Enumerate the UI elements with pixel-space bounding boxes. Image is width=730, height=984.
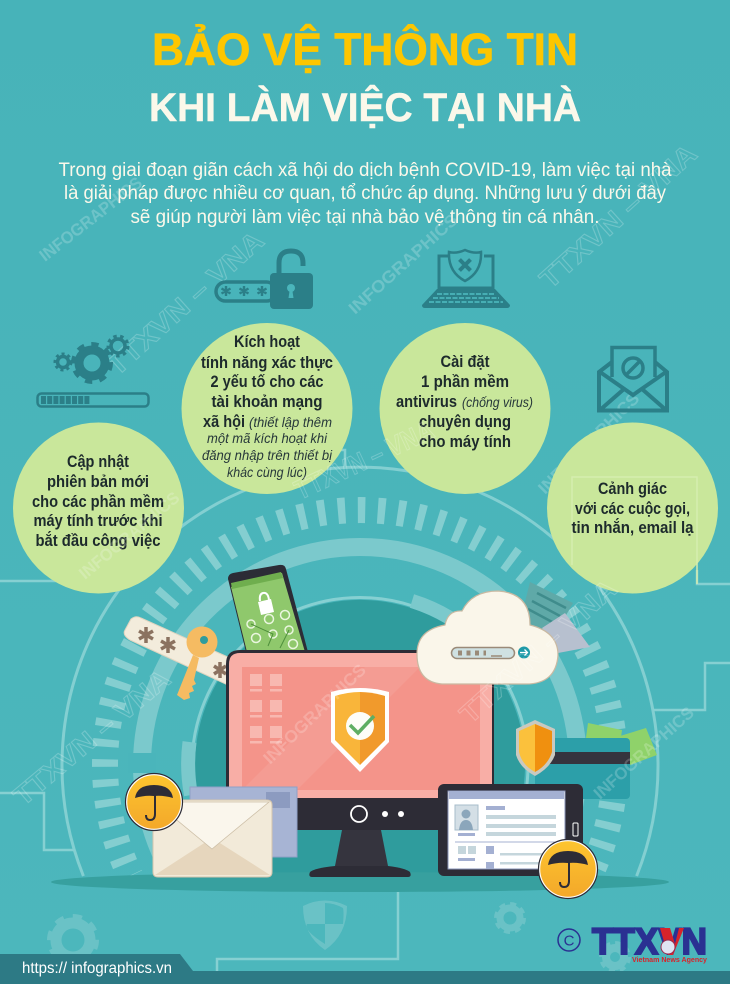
illustration: login cloud — [417, 591, 558, 684]
title — [149, 24, 581, 130]
illustration: smartphone — [228, 565, 308, 652]
background icons — [50, 900, 629, 971]
step 2 bubble: 2 yếu tố cho các — [210, 373, 324, 391]
step 2 bubble: tài khoản mạng — [212, 393, 322, 411]
watermarks over illustration: TTXVN – VNA — [290, 415, 438, 505]
intro paragraph: Trong giai đoạn giãn cách xã hội do dịch bệnh COVID-19, làm việc tại nhà — [58, 160, 672, 181]
icon: password lock — [216, 251, 313, 309]
step 4 bubble: với các cuộc gọi, — [575, 500, 690, 518]
step 4 bubble: tin nhắn, email lạ — [572, 518, 694, 537]
illustration: tablet with profile — [438, 784, 583, 876]
icon: laptop with shield — [422, 250, 510, 308]
footer bar — [0, 954, 730, 984]
step 2 bubble: (thiết lập thêm — [249, 414, 332, 430]
illustration: monitor — [226, 650, 494, 877]
illustration: newspaper behind cloud — [520, 582, 590, 653]
step 1 bubble: cho các phần mềm — [32, 493, 164, 511]
intro paragraph: là giải pháp được nhiều cơ quan, tổ chức áp dụng. Những lưu ý dưới đây — [64, 183, 666, 204]
intro paragraph: sẽ giúp người làm việc tại nhà bảo vệ thông tin cá nhân. — [130, 207, 600, 228]
watermarks over illustration: INFOGRAPHICS — [75, 488, 183, 583]
step 2 bubble: tính năng xác thực — [201, 354, 333, 372]
illustration: credit card, money and shield — [516, 720, 657, 799]
watermarks over illustration: INFOGRAPHICS — [260, 660, 370, 768]
illustration: envelope — [153, 800, 272, 877]
watermarks over illustration: TTXVN – VNA — [8, 663, 176, 812]
icon: gears and progress bar — [38, 336, 148, 406]
step 3 bubble: 1 phần mềm — [421, 373, 509, 391]
watermarks — [36, 138, 703, 498]
icon: umbrella badge left — [126, 774, 182, 830]
watermarks over illustration: INFOGRAPHICS — [590, 703, 698, 803]
monitor buttons — [351, 806, 367, 822]
watermarks: INFOGRAPHICS — [36, 173, 146, 265]
step 1 bubble: Cập nhật — [67, 453, 129, 471]
step 3 bubble: chuyên dụng — [419, 413, 511, 431]
step 4 bubble — [547, 422, 718, 594]
step 2 bubble: đăng nhập trên thiết bị — [202, 447, 333, 463]
security shield — [331, 688, 389, 772]
illustration: password strip and key — [124, 617, 230, 700]
title: BẢO VỆ THÔNG TIN — [152, 24, 578, 75]
title: KHI LÀM VIỆC TẠI NHÀ — [149, 84, 581, 130]
background shield — [303, 900, 347, 950]
step 4 bubble: Cảnh giác — [598, 480, 667, 498]
step 2 bubble: khác cùng lúc) — [227, 464, 307, 480]
icon: envelope with blocked symbol — [599, 348, 667, 410]
step 3 bubble: antivirus — [396, 393, 457, 411]
watermarks: TTXVN – VNA — [534, 138, 703, 294]
step 2 bubble: xã hội — [203, 413, 245, 431]
step 3 bubble — [380, 323, 550, 494]
step 1 bubble: bắt đầu công việc — [36, 531, 160, 550]
step 2 bubble: Kích hoạt — [234, 333, 300, 351]
watermarks: TTXVN – VNA — [101, 225, 270, 381]
app icons — [250, 674, 282, 744]
illustration: blue document — [190, 787, 297, 857]
step 2 bubble: một mã kích hoạt khi — [207, 430, 328, 446]
background gear logo — [601, 943, 629, 971]
logo: TTXVN: Vietnam News Agency — [632, 955, 708, 964]
step 1 bubble: phiên bản mới — [47, 473, 149, 491]
step 1 bubble: máy tính trước khi — [34, 512, 162, 530]
watermarks: INFOGRAPHICS — [534, 389, 643, 498]
step 2 bubble — [182, 323, 352, 494]
watermarks over illustration — [8, 415, 698, 812]
icon: umbrella badge right — [538, 840, 598, 898]
background gear right — [496, 904, 524, 932]
logo: TTXVN: C — [564, 932, 575, 950]
step 1 bubble — [13, 422, 184, 594]
background circuit lines — [0, 450, 730, 971]
monitor stand — [335, 830, 388, 866]
background arcs and rings — [62, 467, 658, 876]
watermarks: INFOGRAPHICS — [345, 210, 462, 318]
watermarks over illustration: TTXVN – VNA — [454, 573, 623, 729]
background gear left — [50, 917, 96, 963]
floor shadow — [51, 872, 669, 892]
step 3 bubble: Cài đặt — [440, 353, 490, 371]
intro paragraph — [58, 160, 672, 228]
step 3 bubble: (chống virus) — [462, 394, 533, 410]
logo: TTXVN: TTXVN — [592, 921, 707, 962]
step 3 bubble: cho máy tính — [419, 433, 511, 451]
website url: https:// infographics.vn — [22, 960, 172, 977]
